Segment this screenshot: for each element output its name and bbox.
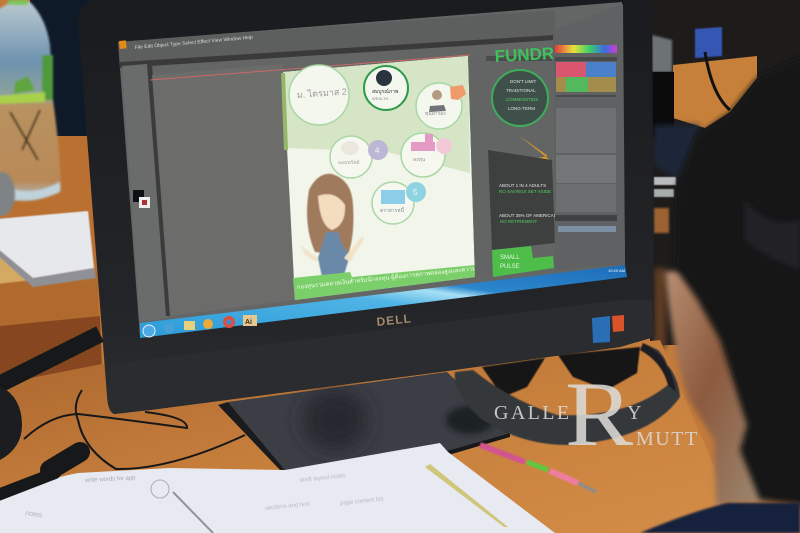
green ring callout: LONG-TERM [508, 106, 535, 111]
illustrated woman [300, 174, 364, 277]
water bottle [0, 0, 61, 201]
app menu bar: File Edit Object Type Select Effect View Window Help [135, 35, 253, 51]
dark statistics block: ABOUT 1 IN 4 ADULTS [499, 183, 546, 188]
dark statistics block: NO SAVINGS SET ASIDE [499, 189, 551, 194]
circle 4: 4 [375, 146, 380, 155]
circle 5 [401, 133, 452, 177]
desk surface [0, 340, 720, 533]
canvas [152, 64, 295, 316]
monitor bezel [78, 0, 654, 414]
monitor stand [218, 372, 510, 473]
circle 4: ออมทรัพย์ [338, 159, 360, 166]
microphone handle and foam [0, 452, 80, 495]
circle 1 [289, 65, 349, 125]
circle 1: ม. ไตรมาส 2 [296, 87, 347, 100]
wheat icon [518, 135, 550, 162]
green footer band [293, 262, 496, 300]
circle 6 [372, 182, 426, 224]
circle 5: ลงทุน [413, 157, 426, 163]
green small block [492, 246, 554, 277]
watermark: GALLERY RMUTT: Y [627, 402, 641, 424]
ear cup right [558, 347, 640, 390]
circle 3 [416, 83, 466, 129]
black headset blob at left edge [0, 384, 22, 462]
paper worksheet at bottom: sections and text [265, 501, 310, 512]
right-hand swatch and properties panels [553, 4, 625, 270]
wooden shelf on left [0, 136, 102, 388]
dark statistics block [488, 150, 560, 250]
red ruler guide [150, 55, 470, 80]
circle 2: highlighted: สมบูรณ์ภาพ [372, 88, 398, 95]
thick wrapped cable [0, 334, 100, 385]
green small block: SMALL [500, 255, 520, 261]
green ring callout [492, 70, 548, 126]
green ring callout: DON'T LIMIT [510, 79, 537, 84]
pen [480, 445, 596, 492]
headphones [455, 343, 680, 445]
green ring callout: COMMODITIES [506, 97, 538, 102]
dark statistics block: NO RETIREMENT [500, 219, 538, 224]
intel and ubuntu badges [592, 315, 624, 343]
watermark: GALLERY RMUTT [494, 363, 699, 465]
app menu bar [118, 10, 555, 68]
ear and neck skin [665, 268, 770, 505]
green footer band: กองทุนรวมตลาดเงินสำหรับนักลงทุน ผู้ต้องการสภาพคล่องสูงและความเสี่ยงต่ำ [296, 262, 496, 291]
person: head and hair in the foreground [640, 40, 800, 533]
windows taskbar [140, 265, 627, 338]
notebook [0, 211, 96, 287]
windows taskbar: Ai [245, 319, 252, 326]
monitor screen: illustrator workspace [118, 2, 627, 338]
thin cable loops [24, 390, 245, 469]
paper worksheet at bottom [0, 443, 555, 533]
second artboard: dark fundraising panel: FUNDR [494, 44, 555, 66]
dell logo: DELL [376, 311, 412, 329]
circle 6: ตราสารหนี้ [380, 205, 405, 214]
circle 6: 5 [413, 188, 418, 197]
paper worksheet at bottom: notes [25, 510, 43, 519]
artboard page [281, 56, 496, 300]
navy shirt [640, 503, 800, 533]
paper worksheet at bottom: write words for app [84, 475, 136, 484]
windows taskbar: 10:20 AM [608, 268, 625, 273]
dark statistics block: ABOUT 35% OF AMERICANS [499, 213, 560, 218]
watermark: GALLERY RMUTT: R [565, 363, 634, 465]
green header area [283, 56, 470, 173]
tools panel [122, 64, 168, 322]
second artboard: dark fundraising panel [468, 44, 560, 277]
circle 2: highlighted [364, 66, 408, 110]
green small block: PULSE [500, 264, 520, 270]
paper worksheet at bottom: page content list [340, 496, 384, 507]
ear cup left [482, 358, 545, 397]
paper worksheet at bottom: draft layout notes [300, 473, 346, 484]
microphone head behind notebook [0, 172, 15, 216]
circle 3: ทุนสำรอง [425, 111, 446, 117]
circle 2: highlighted: WEALTH [372, 96, 388, 101]
head band [455, 343, 680, 445]
cables and microphone [0, 334, 245, 495]
hair [675, 40, 800, 510]
watermark: GALLERY RMUTT: MUTT [636, 428, 699, 450]
green ring callout: TRADITIONAL [506, 88, 536, 93]
watermark: GALLERY RMUTT: GALLE [494, 402, 572, 424]
circle 4 [330, 136, 388, 178]
